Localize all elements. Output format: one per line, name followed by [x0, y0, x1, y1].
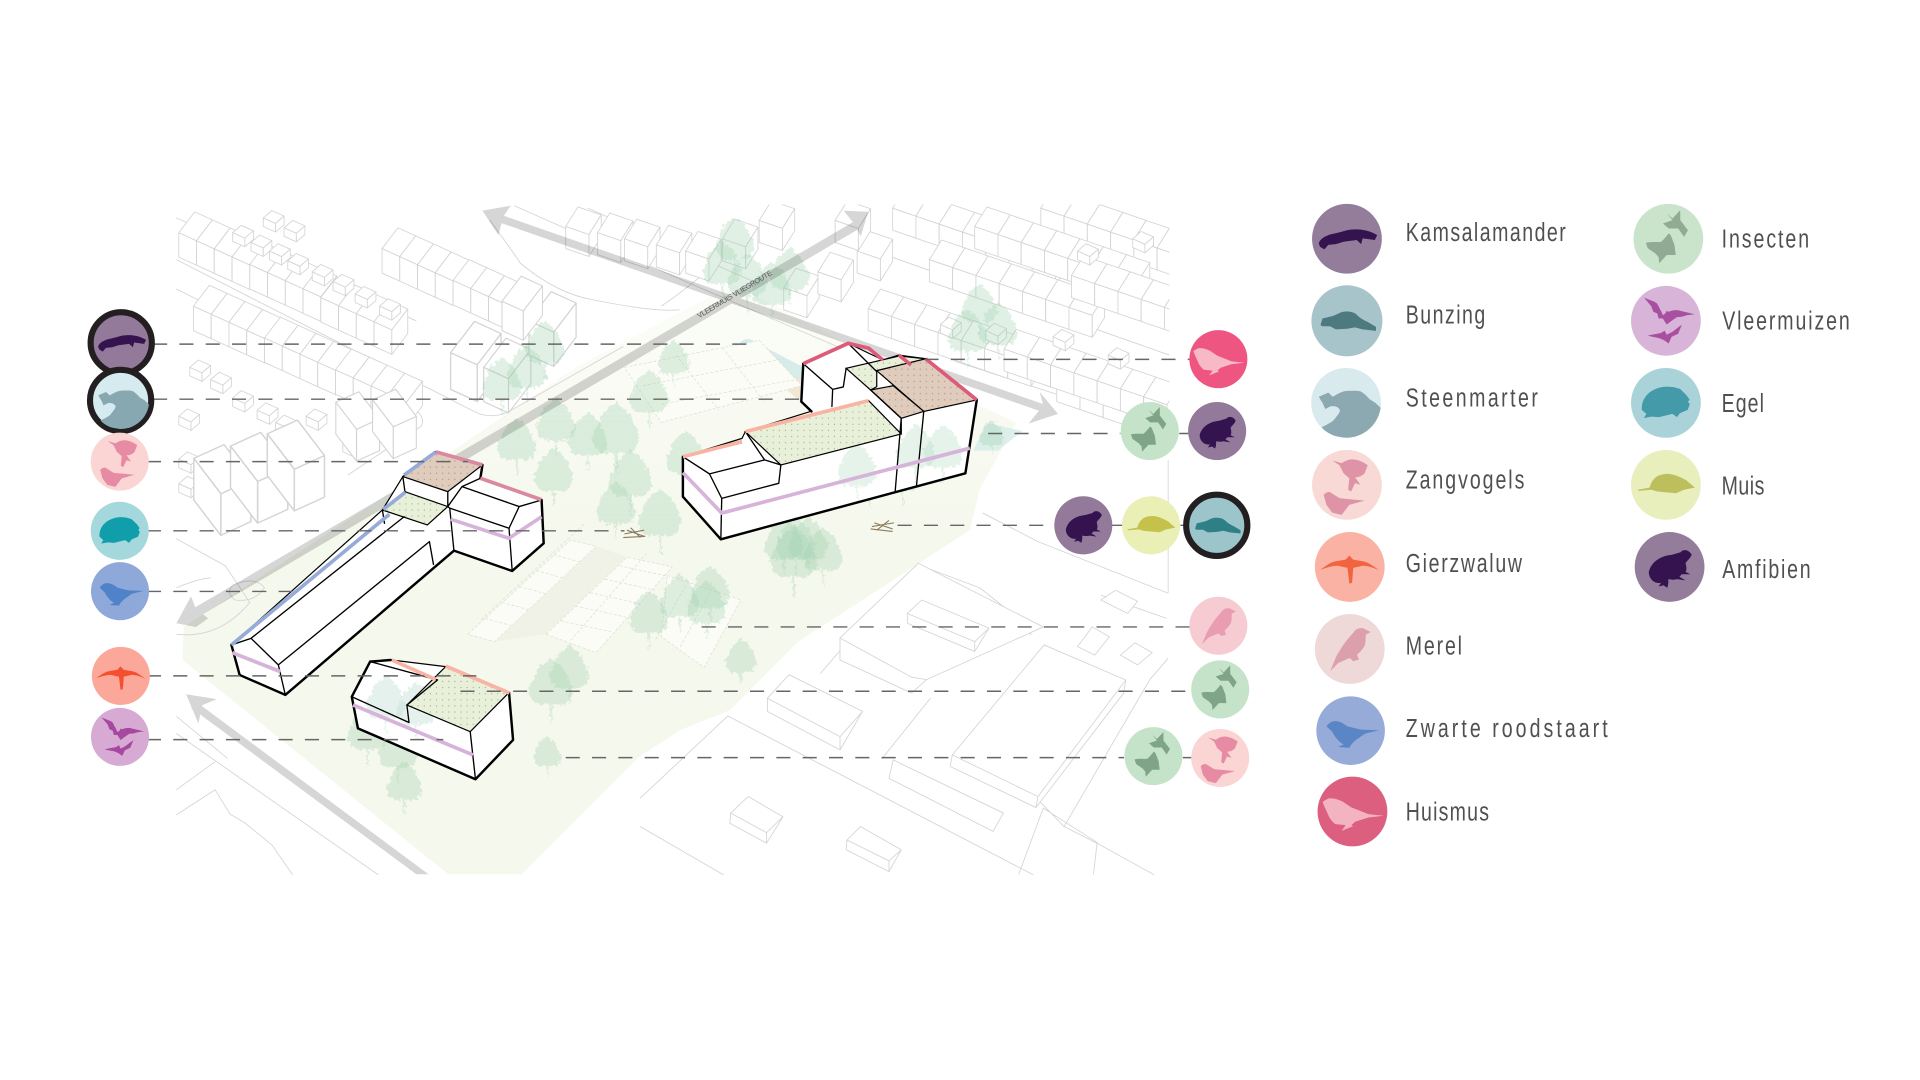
legend item: Gierzwaluw [1315, 532, 1522, 602]
marker: Insecten third [1124, 727, 1182, 785]
marker: Zangvogels [91, 433, 149, 491]
marker: Zwarte roodstaart [91, 562, 149, 620]
building: centre block with long wing [231, 452, 544, 695]
purple bat ledge line [683, 448, 970, 513]
legend item: Steenmarter: Steenmarter [1406, 383, 1538, 412]
trees [348, 217, 1017, 814]
heavy outline [231, 465, 544, 695]
arrow: southern route [186, 694, 429, 874]
parking grids [468, 340, 802, 667]
marker: Muis [1122, 496, 1180, 554]
dashed connector lines [147, 344, 1191, 758]
legend item: Zwarte roodstaart: Zwarte roodstaart [1406, 713, 1608, 743]
facade lines [683, 343, 924, 539]
green dotted roof [382, 492, 448, 525]
legend item: Amfibien [1635, 532, 1811, 602]
right species markers [1054, 330, 1249, 787]
building: north-east block [683, 343, 977, 576]
green site ground [182, 284, 1016, 874]
green dotted roof [745, 401, 901, 465]
arrow: bat flight route north-west to south-east [482, 206, 1058, 424]
flight route arrows [176, 206, 1058, 874]
salmon swift ledge lines [392, 660, 509, 693]
legend item: Bunzing [1311, 285, 1485, 356]
marker: Amfibien [1188, 402, 1246, 460]
purple bat ledge line [353, 705, 473, 755]
marker: Steenmarter [90, 370, 151, 431]
legend item: Insecten: Insecten [1722, 224, 1809, 253]
green dotted rear roof [846, 356, 926, 390]
legend item: Merel [1315, 614, 1462, 684]
legend item: Steenmarter [1311, 368, 1538, 438]
marker: Insecten second [1191, 660, 1249, 718]
legend item: Gierzwaluw: Gierzwaluw [1406, 548, 1522, 577]
pink ledge lines [436, 452, 541, 500]
legend: species key [1311, 204, 1850, 846]
water feature and tan path [740, 339, 1022, 451]
tree shadows on facade [776, 425, 962, 576]
legend item: Kamsalamander [1312, 204, 1566, 274]
marker: Kamsalamander [91, 312, 152, 373]
legend item: Amfibien: Amfibien [1722, 554, 1811, 584]
marker: Bunzing [1186, 495, 1247, 556]
legend item: Huismus: Huismus [1406, 797, 1489, 826]
legend item: Muis [1631, 450, 1764, 520]
legend item: Kamsalamander: Kamsalamander [1406, 218, 1566, 247]
twig piles [623, 520, 894, 538]
legend item: Zangvogels: Zangvogels [1406, 465, 1524, 494]
legend item: Vleermuizen: Vleermuizen [1722, 306, 1850, 335]
tree shadow on facade [366, 676, 436, 741]
marker: Gierzwaluw [92, 647, 150, 705]
legend item: Egel [1631, 368, 1764, 438]
flight route label: VLEERMUIS VLIEGROUTE [696, 268, 774, 320]
left species markers [90, 312, 152, 766]
legend item: Zwarte roodstaart [1316, 696, 1608, 765]
marker: Huismus [1189, 330, 1247, 388]
building: southern block [352, 660, 513, 779]
legend item: Egel: Egel [1722, 388, 1764, 418]
legend item: Merel: Merel [1406, 631, 1462, 660]
line drawing: neighbourhood housing [176, 189, 1247, 635]
marker: Zangvogels second [1191, 729, 1249, 787]
crimson sparrow ledge lines [803, 343, 977, 400]
legend item: Vleermuizen [1631, 286, 1850, 356]
marker: Amfibien second [1054, 496, 1112, 554]
heavy outline [683, 364, 977, 539]
salmon swift ledge lines [683, 401, 869, 457]
legend item: Muis: Muis [1722, 471, 1764, 500]
arrow: diagonal route south-west to north-east [176, 211, 868, 627]
marker: Vleermuizen [91, 708, 149, 766]
legend item: Insecten [1633, 204, 1809, 274]
line drawing: commercial buildings south-east [176, 460, 1168, 875]
legend item: Huismus [1318, 777, 1489, 846]
heavy outline [352, 660, 513, 779]
marker: Insecten [1121, 402, 1179, 460]
panel: isometric site map [176, 189, 1247, 875]
green dotted roof [407, 667, 509, 732]
facade lines [231, 477, 542, 695]
brown dotted roof [403, 452, 482, 492]
brown dotted roofs [871, 359, 977, 418]
legend item: Zangvogels [1312, 450, 1524, 520]
marker: Merel [1189, 597, 1247, 655]
blue redstart ledge lines [231, 452, 436, 645]
marker: Egel [91, 502, 149, 560]
facade lines [352, 662, 475, 779]
legend item: Bunzing: Bunzing [1406, 300, 1485, 329]
purple bat ledge lines [232, 517, 542, 672]
